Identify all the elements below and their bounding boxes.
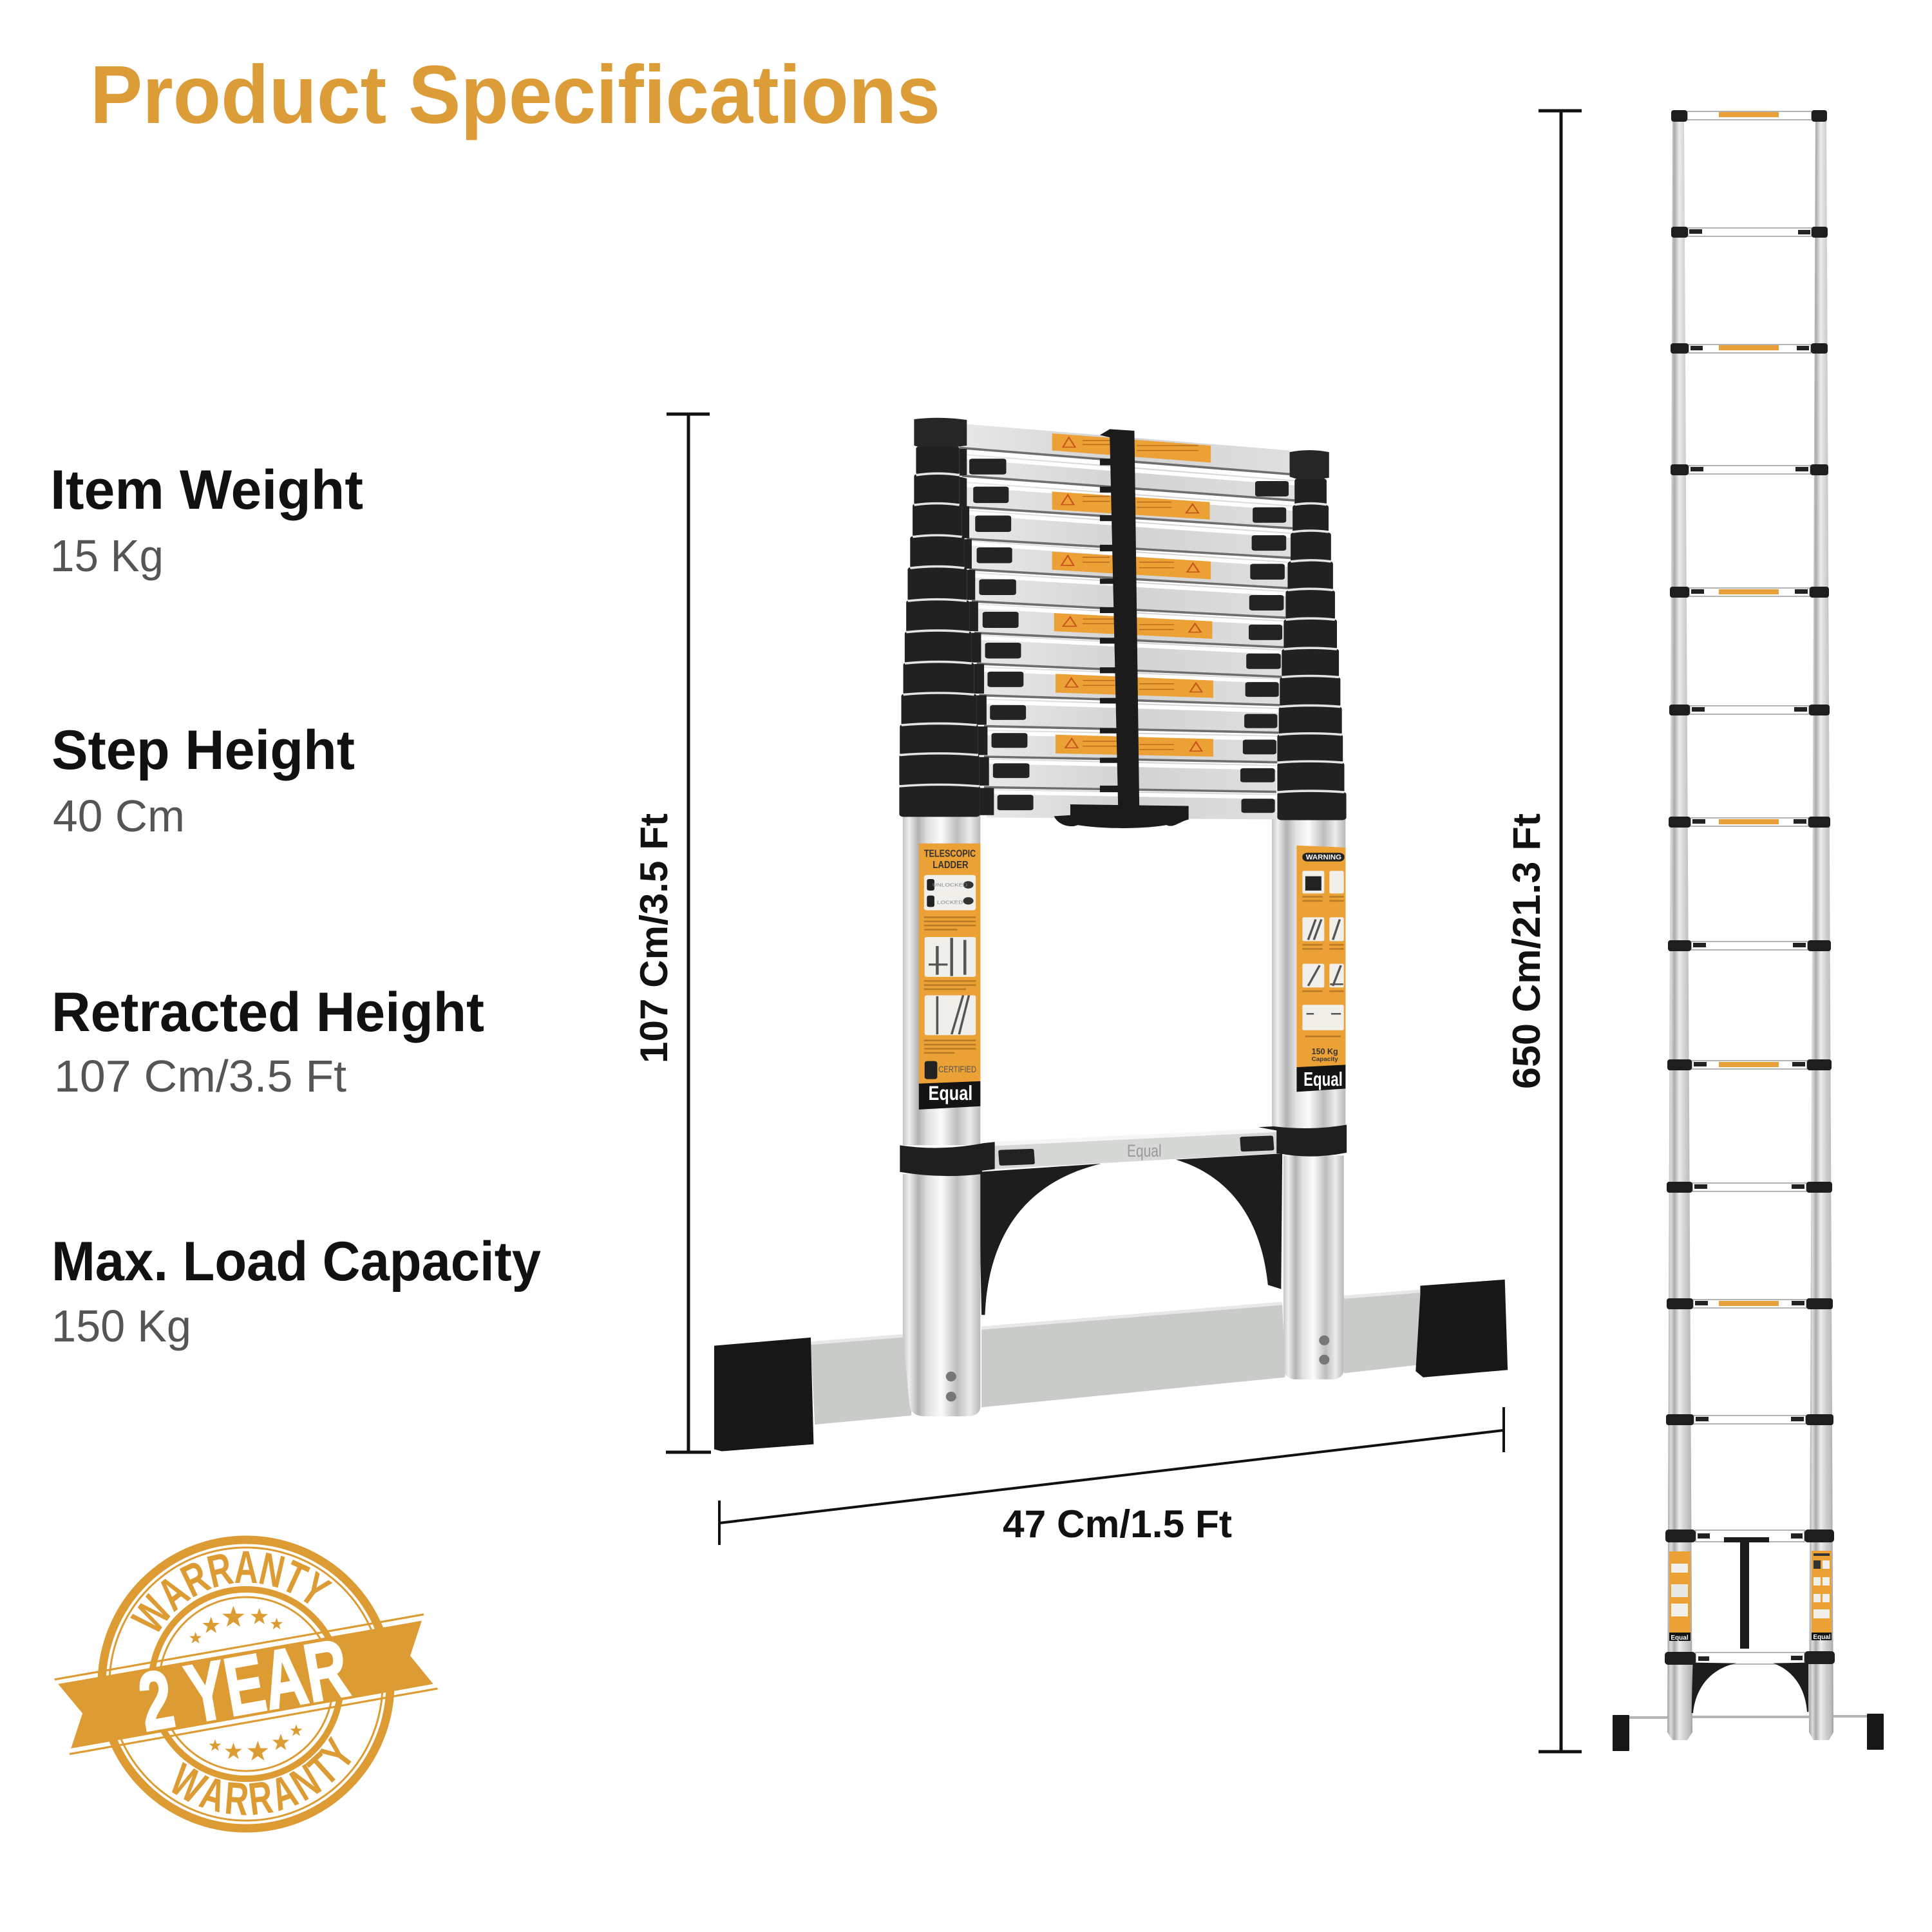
title: Product Specifications <box>90 49 940 141</box>
badge bottom text: Y <box>311 1730 365 1779</box>
badge top text: Y <box>290 1563 339 1617</box>
rung 5 <box>1670 587 1829 598</box>
badge top text: A <box>148 1566 198 1621</box>
rung 10 <box>1667 1182 1832 1193</box>
mini strap <box>1724 1537 1769 1649</box>
right sticker: Capacity <box>1312 1056 1338 1063</box>
badge bottom text: A <box>194 1767 232 1823</box>
grip slots <box>969 459 1289 813</box>
spec: item weight: Item Weight <box>50 459 363 521</box>
base bar <box>811 1291 1420 1425</box>
strap tabs <box>1100 459 1120 792</box>
dimension: width <box>719 1407 1504 1546</box>
badge bottom text: T <box>299 1744 348 1795</box>
dimension: extended height <box>1505 111 1582 1752</box>
strap handle <box>1054 804 1189 828</box>
spec: retracted height: 107 Cm/3.5 Ft <box>54 1051 346 1101</box>
middle tread: Equal <box>1127 1141 1162 1160</box>
retracted ladder: upper stack <box>899 418 1347 828</box>
badge top text: A <box>234 1542 258 1593</box>
dimension: retracted height <box>632 414 711 1452</box>
holes <box>946 1336 1329 1401</box>
clamps <box>900 1124 1347 1176</box>
right rail <box>1809 116 1833 1740</box>
mini right sticker <box>1812 1551 1832 1641</box>
badge top text: N <box>255 1543 289 1598</box>
right sticker: 150 Kg <box>1312 1047 1338 1056</box>
spec: step height: 40 Cm <box>53 791 185 841</box>
warranty badge <box>55 1540 437 1828</box>
rung 7 <box>1669 817 1830 828</box>
left sticker: TELESCOPIC <box>924 848 976 859</box>
left sticker: LOCKED <box>937 900 963 905</box>
badge ribbon <box>55 1615 437 1754</box>
badge top text <box>122 1542 339 1643</box>
left rail <box>1667 116 1692 1740</box>
spec: max load capacity: Max. Load Capacity <box>52 1231 541 1293</box>
spec list <box>50 459 541 1351</box>
badge stars <box>189 1605 303 1761</box>
right collar highlights <box>1277 504 1344 792</box>
left sticker: LADDER <box>933 859 969 870</box>
badge top text: W <box>122 1587 182 1643</box>
rung 3 <box>1671 343 1828 354</box>
base bar <box>1629 1716 1867 1718</box>
dimension: width: 47 Cm/1.5 Ft <box>1003 1502 1232 1546</box>
spec: step height <box>52 719 355 841</box>
right foot <box>1416 1280 1508 1378</box>
mini left sticker <box>1669 1551 1690 1642</box>
spec: item weight <box>50 459 363 581</box>
badge bottom text: R <box>246 1772 276 1826</box>
right sticker: WARNING <box>1306 853 1341 861</box>
rung 9 <box>1667 1059 1832 1070</box>
right sticker <box>1296 846 1345 1092</box>
badge bottom text: W <box>162 1754 214 1814</box>
left sticker: UNLOCKED <box>933 882 967 887</box>
badge bottom text: A <box>265 1765 303 1821</box>
tread stickers <box>1052 433 1213 757</box>
rung 13 with slots <box>1665 1530 1834 1542</box>
brackets <box>979 1153 1282 1315</box>
badge bottom text <box>162 1730 365 1826</box>
left tube <box>903 813 980 1145</box>
badge bottom text: R <box>223 1773 251 1826</box>
spec: max load capacity <box>52 1231 541 1351</box>
badge bottom text: N <box>282 1755 329 1811</box>
middle tread <box>983 1129 1276 1169</box>
badge ribbon text: 2 YEAR <box>133 1622 355 1749</box>
left sticker: CERTIFIED <box>938 1064 976 1074</box>
rung 6 <box>1669 705 1830 715</box>
right tube <box>1272 813 1345 1129</box>
dimension: retracted height: 107 Cm/3.5 Ft <box>632 813 676 1063</box>
rung 11 <box>1667 1298 1833 1309</box>
strap <box>1100 429 1139 807</box>
rung 12 <box>1666 1414 1833 1425</box>
treads <box>960 424 1294 819</box>
right lower tube <box>1283 1155 1344 1379</box>
mini right foot <box>1867 1714 1884 1750</box>
rung 1 <box>1671 110 1827 122</box>
rung 2 <box>1671 227 1828 238</box>
left black collars <box>899 446 994 817</box>
dimension: extended height: 650 Cm/21.3 Ft <box>1505 813 1548 1089</box>
left collar highlights <box>899 473 979 786</box>
top left cap <box>914 418 967 447</box>
retracted ladder: lower section <box>714 813 1508 1452</box>
top right cap <box>1290 450 1329 479</box>
right black collars <box>1277 478 1347 820</box>
spec: retracted height <box>52 981 484 1101</box>
rung 14 with slots <box>1665 1651 1835 1665</box>
spec: retracted height: Retracted Height <box>52 981 484 1043</box>
mini left sticker: Equal <box>1671 1634 1689 1642</box>
spec: max load capacity: 150 Kg <box>52 1301 191 1351</box>
rung 8 <box>1668 940 1831 951</box>
left foot <box>714 1338 813 1452</box>
mini brackets <box>1692 1663 1808 1713</box>
mini right sticker: Equal <box>1813 1634 1831 1641</box>
spec: item weight: 15 Kg <box>50 531 164 581</box>
sticker warning lines <box>1061 437 1202 751</box>
rung 4 <box>1671 464 1828 475</box>
left sticker <box>919 844 980 1110</box>
badge rings <box>102 1540 390 1828</box>
badge top text: R <box>203 1543 237 1598</box>
badge top text: R <box>174 1551 217 1607</box>
extended ladder <box>1613 110 1884 1751</box>
right sticker: Equal <box>1303 1068 1343 1090</box>
left lower tube <box>903 1174 980 1416</box>
mini left foot <box>1613 1715 1629 1751</box>
left sticker: Equal <box>929 1082 972 1105</box>
spec: step height: Step Height <box>52 719 355 781</box>
badge top text: T <box>275 1551 315 1606</box>
